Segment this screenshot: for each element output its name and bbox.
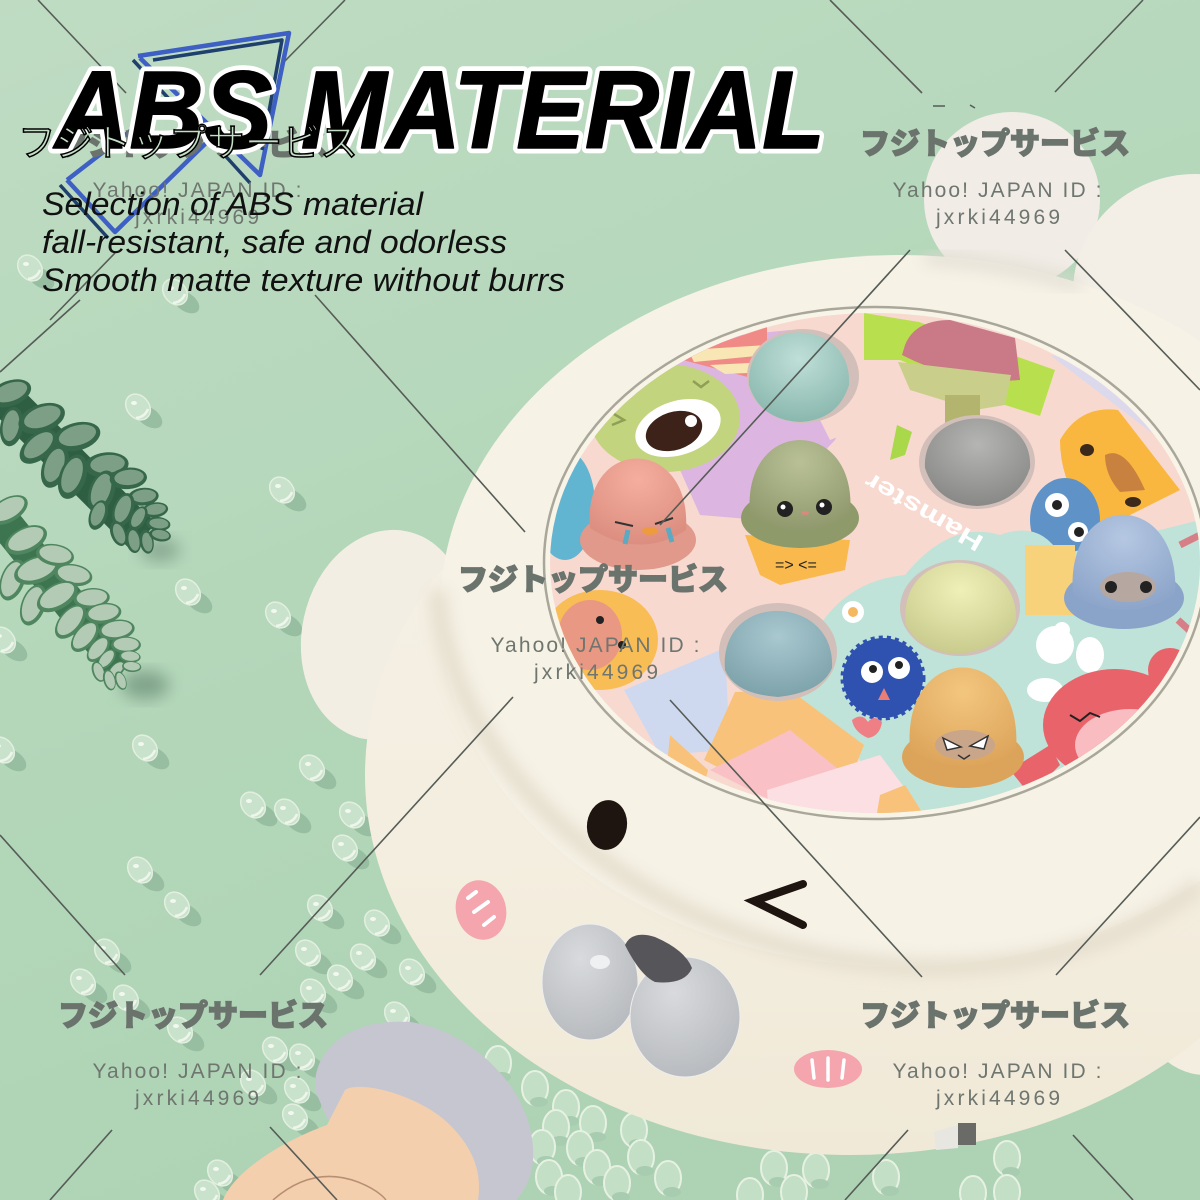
board art: lower left geometric shapes [624, 650, 921, 813]
left cheek [449, 875, 513, 945]
mole: orange angry [902, 668, 1024, 788]
board art: duck [1060, 409, 1180, 530]
katakana overlay: フジトップサービス [18, 123, 358, 165]
mole: steel blue dome [725, 611, 832, 697]
board art: lilac right patch [1050, 355, 1153, 434]
right cheek [794, 1050, 862, 1088]
upper fern [0, 374, 172, 555]
watermark: bottom right: jxrki44969 [935, 1087, 1060, 1110]
board art: red crab [1014, 648, 1180, 786]
main shell lower [365, 395, 1200, 1155]
hammer ring [315, 1022, 533, 1200]
title: ABS MATERIAL [52, 49, 825, 172]
toy body [282, 112, 1200, 1155]
holes [719, 329, 1035, 701]
left ear [282, 514, 488, 756]
watermark: top right [860, 127, 1130, 229]
watermark: bottom left: Yahoo! JAPAN ID : [92, 1060, 302, 1083]
board art: teal cloud [800, 520, 1200, 820]
title: ABS MATERIAL [52, 49, 825, 172]
board art: one-eyed monster [590, 364, 740, 472]
nose tip [625, 935, 692, 982]
watermark: bottom right [860, 999, 1130, 1110]
board art: blue left patch [550, 458, 594, 560]
description text: Smooth matte texture without burrs [42, 262, 565, 298]
hammer [223, 1022, 533, 1200]
board art: blue fuzzy monster [843, 638, 923, 718]
board art: bow [890, 425, 912, 460]
watermark: centre: Yahoo! JAPAN ID : [490, 634, 700, 657]
board art: pale pink top [820, 412, 845, 440]
watermark: top right: Yahoo! JAPAN ID : [892, 179, 1102, 202]
board art: purple patch [590, 330, 845, 520]
plate crease shading [438, 590, 1200, 967]
mole: teal dome [749, 332, 849, 422]
watermark: bottom left [58, 999, 328, 1110]
watermark: top left: フジトップサービス [58, 128, 328, 162]
watermark: top left: Yahoo! JAPAN ID : [92, 179, 302, 202]
watermark: centre: jxrki44969 [533, 661, 658, 684]
top right shoulder [1073, 174, 1200, 410]
ear join shading [925, 258, 1080, 285]
lower right ear [1137, 915, 1200, 1075]
watermark: bottom left: jxrki44969 [134, 1087, 259, 1110]
mole: olive smiling [741, 440, 859, 548]
description text [42, 186, 565, 298]
description text: Selection of ABS material [42, 186, 424, 222]
board art: zigzag right [1178, 535, 1200, 640]
top ear [924, 112, 1100, 288]
watermark: centre [458, 563, 728, 684]
board art: mushroom [864, 313, 1055, 423]
watermark: bottom right: Yahoo! JAPAN ID : [892, 1060, 1102, 1083]
water beads [0, 250, 1020, 1200]
main shell upper plate [440, 255, 1200, 967]
board art: hamster text: Hamster [860, 467, 988, 556]
board art: orange cat under olive mole [745, 535, 850, 585]
watermark: top left: jxrki44969 [134, 206, 259, 229]
game board [535, 300, 1200, 830]
watermark: top left [58, 128, 328, 229]
eye [584, 797, 630, 853]
mole: yellow dome [905, 563, 1016, 654]
board art: flower and hearts [842, 601, 882, 738]
winking eye [754, 884, 803, 925]
blue triangle mark [60, 33, 289, 238]
snout [542, 924, 740, 1077]
watermark: bottom left: フジトップサービス [58, 999, 328, 1033]
board art: yellow block [1025, 545, 1075, 615]
board art: sunflower [555, 590, 658, 690]
watermark: centre: フジトップサービス [458, 563, 728, 597]
hammer handle [223, 1087, 479, 1200]
watermark: top right: jxrki44969 [935, 206, 1060, 229]
board art: white bubbles [1027, 622, 1104, 702]
watermark: bottom right: フジトップサービス [860, 999, 1130, 1033]
board art: orange cat under olive mole: => <= [775, 557, 817, 574]
mole: pink crying [580, 458, 696, 570]
fern leaves [0, 374, 180, 699]
board art: blue fuzzy top right [1030, 478, 1100, 552]
face [449, 797, 862, 1088]
mole: blue hamster [1064, 515, 1184, 629]
watermark: top right: フジトップサービス [860, 127, 1130, 161]
board art: striped hat [684, 327, 767, 377]
mole: gray dome [925, 418, 1030, 506]
description text: fall-resistant, safe and odorless [42, 224, 507, 260]
lower fern [0, 489, 142, 692]
side button [934, 1123, 976, 1150]
